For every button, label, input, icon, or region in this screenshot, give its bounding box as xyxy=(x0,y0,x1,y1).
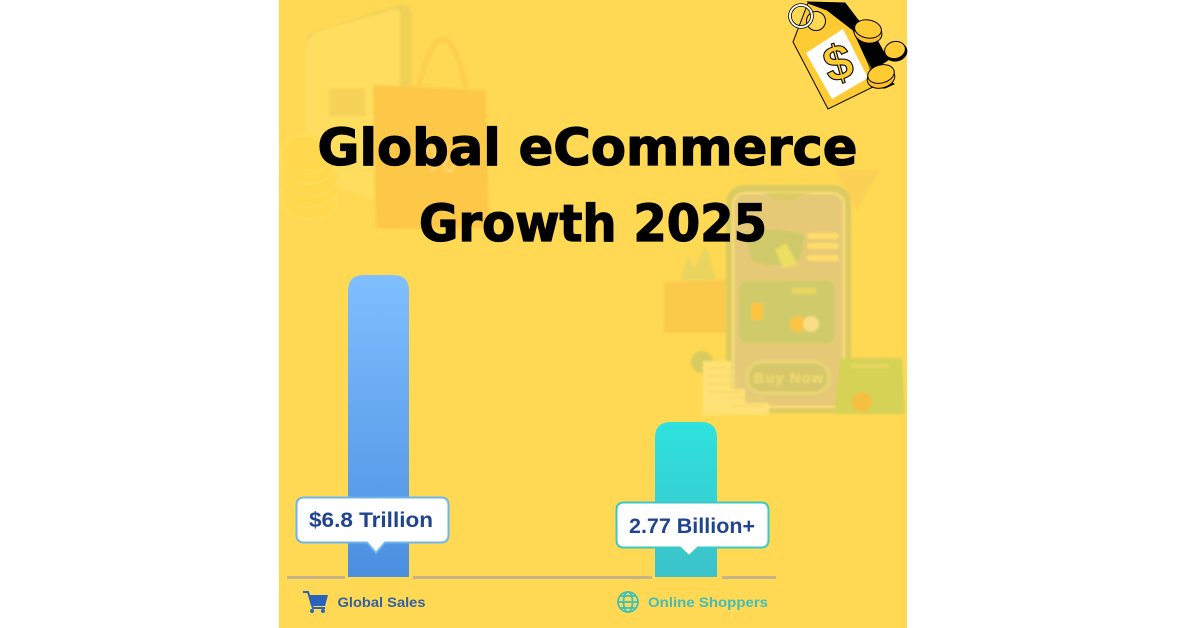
icon: green takeaway box xyxy=(834,358,905,414)
bar: online shoppers xyxy=(655,422,717,577)
icon: shopping cart xyxy=(303,592,328,613)
label: Online Shoppers: Online Shoppers xyxy=(648,594,768,610)
coin 2 xyxy=(883,40,909,64)
callout: 2.77 Billion+: 2.77 Billion+ xyxy=(629,515,755,538)
title: Growth 2025 xyxy=(419,195,767,254)
callout: 2.77 Billion+ xyxy=(616,502,768,556)
coin 3 xyxy=(865,65,897,91)
panel: yellow background xyxy=(279,0,907,628)
icon: price tag with dollar and coins: $ xyxy=(817,32,859,94)
label: Global Sales: Global Sales xyxy=(338,594,426,610)
illustration: faded phone with Buy Now button xyxy=(664,170,905,415)
icon: receipts and badge xyxy=(691,351,713,373)
callout: $6.8 Trillion: $6.8 Trillion xyxy=(309,509,433,532)
coin 1 xyxy=(852,21,884,45)
title: Global eCommerce xyxy=(318,119,858,178)
callout: $6.8 Trillion xyxy=(296,498,448,553)
illustration: faded phone and shopping bag: % xyxy=(423,139,457,181)
icon: stacked coins xyxy=(281,135,338,219)
illustration: faded phone and shopping bag xyxy=(281,5,489,229)
icon: price tag with dollar and coins xyxy=(790,2,909,109)
illustration: faded phone with Buy Now button: Buy Now xyxy=(754,371,824,387)
chart: axis baseline xyxy=(287,576,776,579)
bar: global sales xyxy=(348,275,409,577)
title xyxy=(318,119,858,254)
icon: globe xyxy=(618,592,638,612)
